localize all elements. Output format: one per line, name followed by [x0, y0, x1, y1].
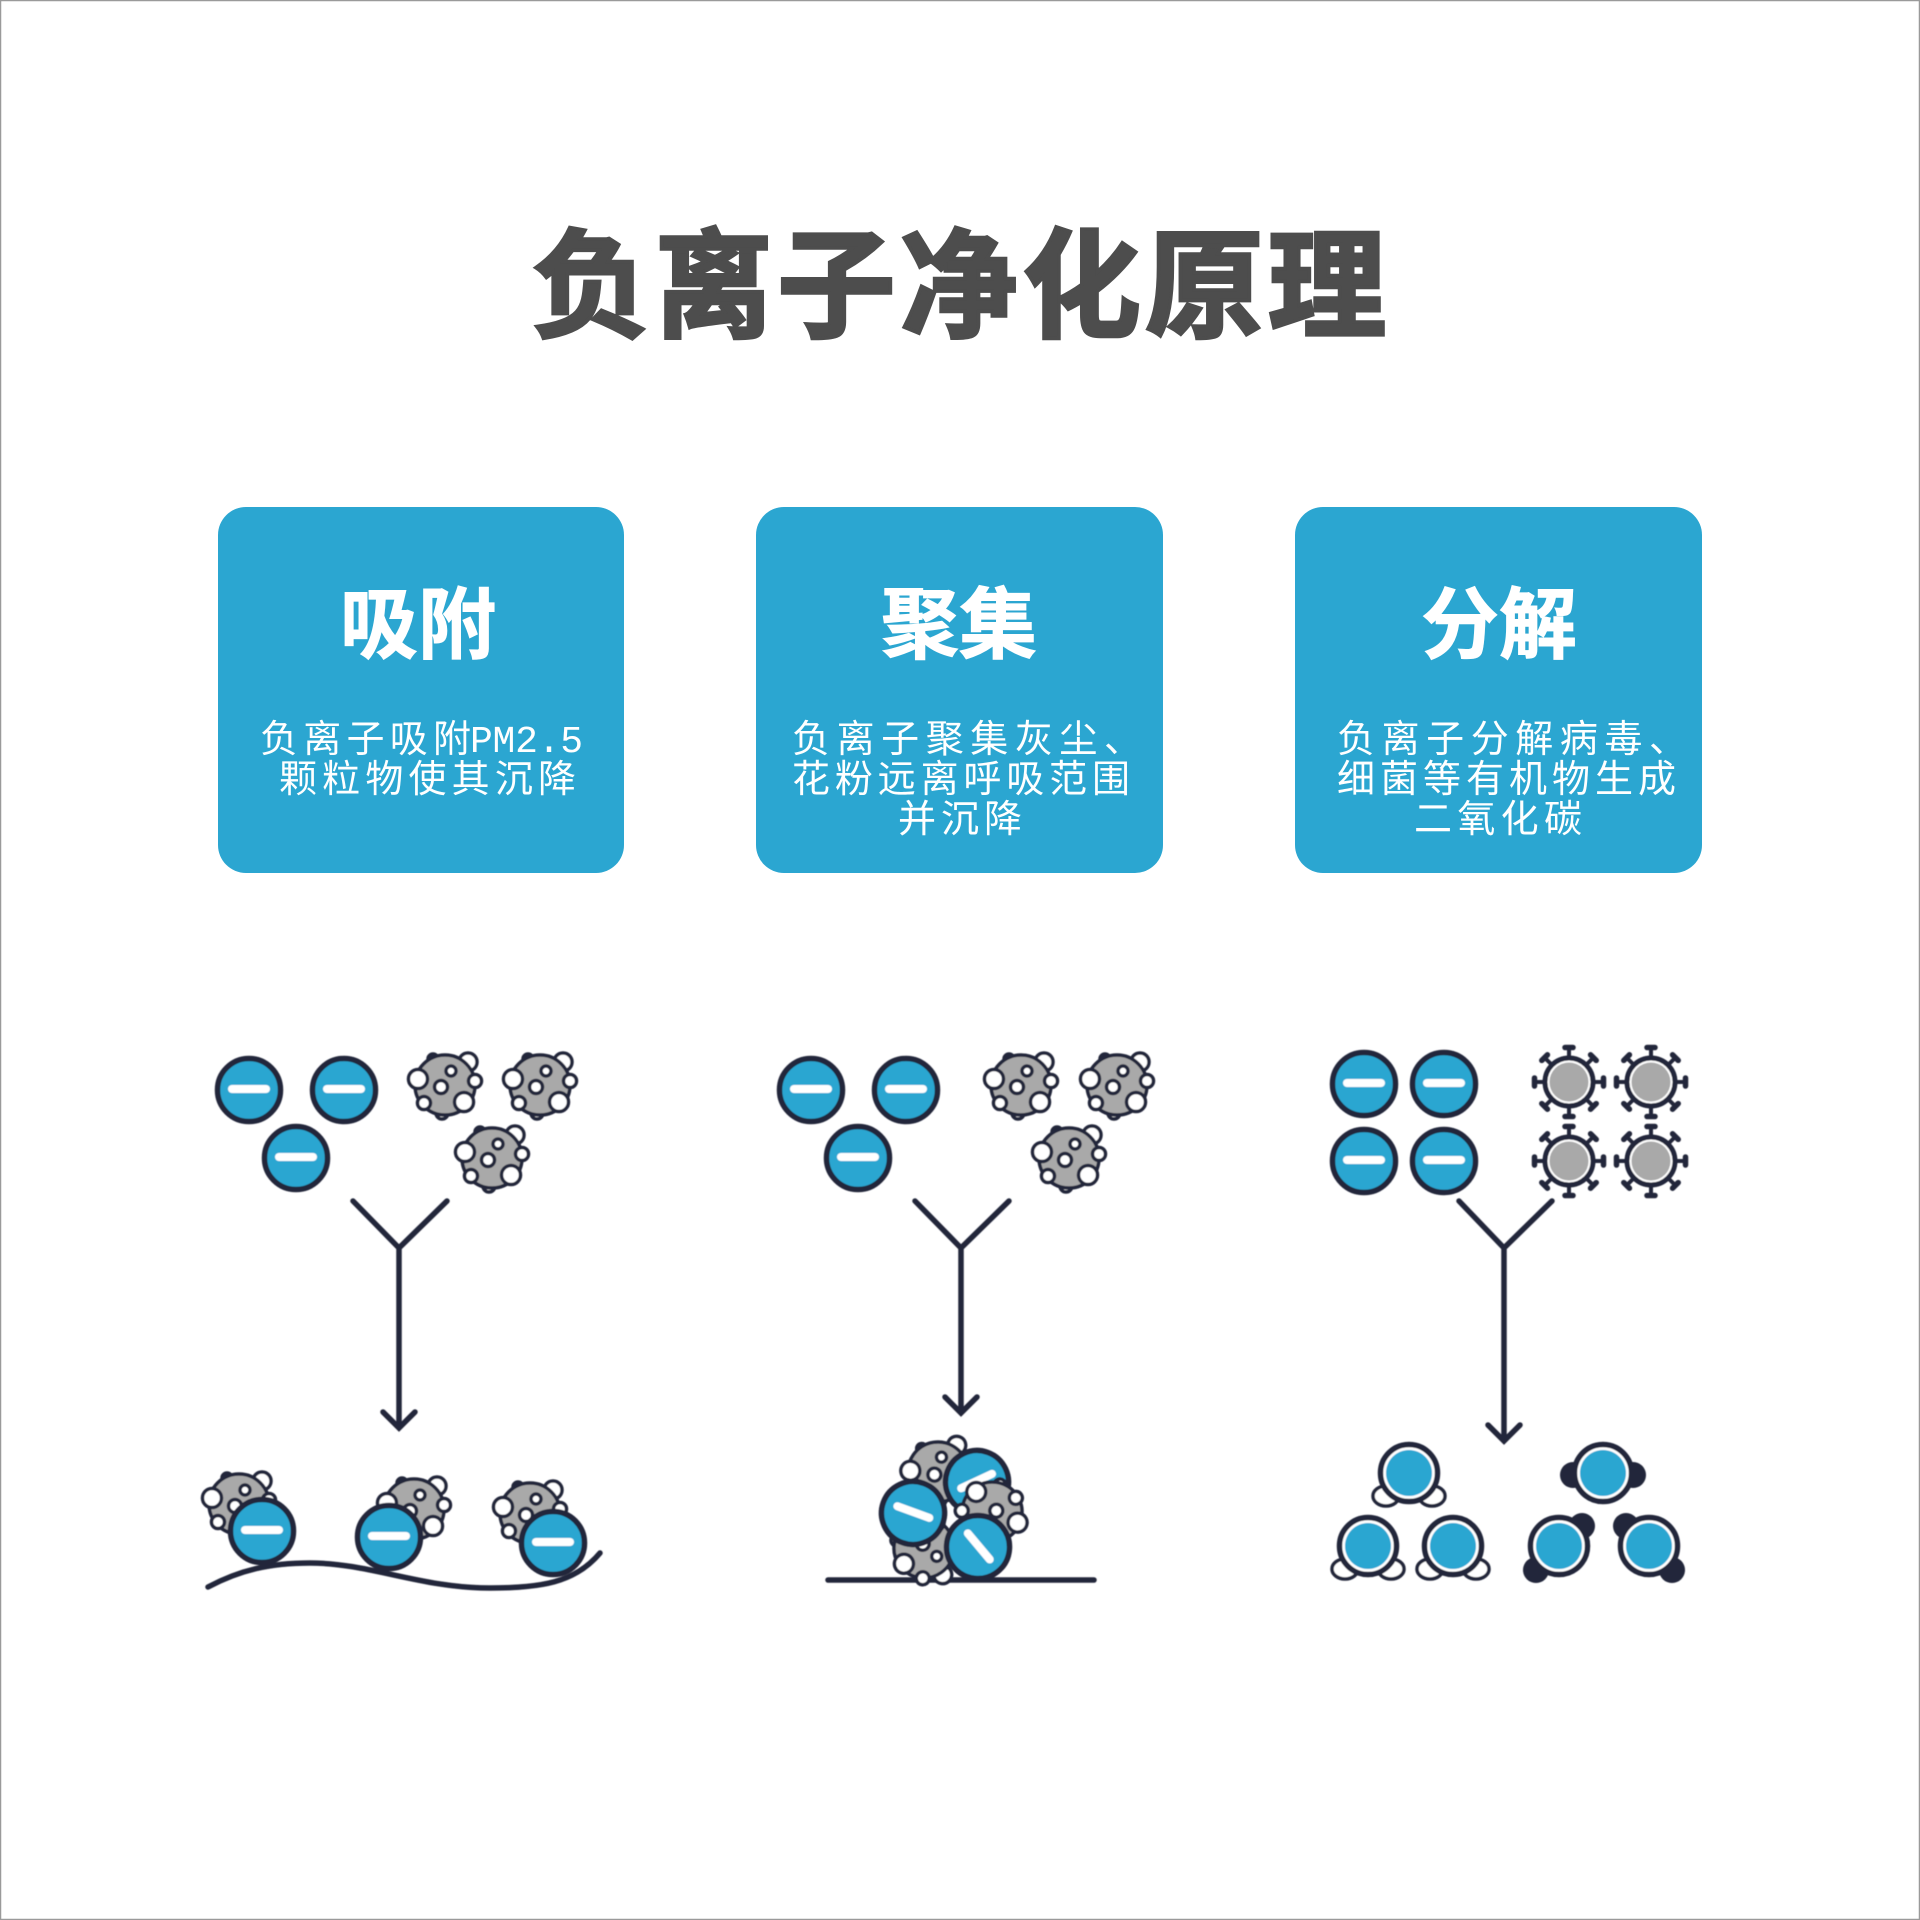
text block: aggregation description: 负离子聚集灰尘、 — [792, 719, 1142, 761]
diagram: adsorption process — [202, 1053, 600, 1588]
text block: adsorption description — [260, 719, 583, 801]
heading: decomposition: 分解 — [1421, 563, 1577, 675]
title: 负离子净化原理 — [532, 191, 1386, 362]
heading: adsorption: 吸附 — [340, 563, 496, 675]
panel: aggregation card — [756, 507, 1163, 873]
icon: ions attached to particles on surface — [202, 1472, 600, 1588]
text block: adsorption description: 负离子吸附 — [260, 719, 471, 761]
text block: decomposition description: 二氧化碳 — [1414, 799, 1582, 841]
text block: decomposition description — [1337, 719, 1687, 841]
ground line — [828, 1577, 1094, 1583]
arrow: merge downward — [1459, 1201, 1552, 1441]
icon: negative ions — [780, 1058, 938, 1190]
icon: negative ions — [218, 1058, 376, 1190]
text block: aggregation description — [792, 719, 1142, 841]
diagram: aggregation process — [780, 1053, 1154, 1591]
icon: aggregated cluster — [873, 1434, 1034, 1591]
text block: adsorption description: PM2.5 — [470, 721, 583, 764]
diagram: decomposition process — [1332, 1048, 1686, 1583]
text block: aggregation description: 花粉远离呼吸范围 — [792, 759, 1130, 801]
icon: dust particles — [408, 1053, 576, 1192]
text block: adsorption description: 颗粒物使其沉降 — [279, 759, 576, 801]
text block: decomposition description: 细菌等有机物生成 — [1337, 759, 1676, 801]
heading: aggregation: 聚集 — [881, 563, 1037, 675]
icon: negative ions — [1332, 1052, 1476, 1192]
panel: adsorption card — [218, 507, 624, 873]
icon: decomposed molecules, dark lobes — [1523, 1444, 1685, 1583]
text block: decomposition description: 负离子分解病毒、 — [1337, 719, 1687, 761]
arrow: merge downward — [915, 1201, 1009, 1413]
text block: aggregation description: 并沉降 — [898, 799, 1022, 841]
panel: decomposition card — [1295, 507, 1702, 873]
arrow: merge downward — [353, 1201, 447, 1428]
icon: dust particles — [984, 1053, 1154, 1192]
icon: viruses — [1534, 1048, 1686, 1196]
icon: decomposed molecules, white lobes — [1332, 1444, 1489, 1579]
